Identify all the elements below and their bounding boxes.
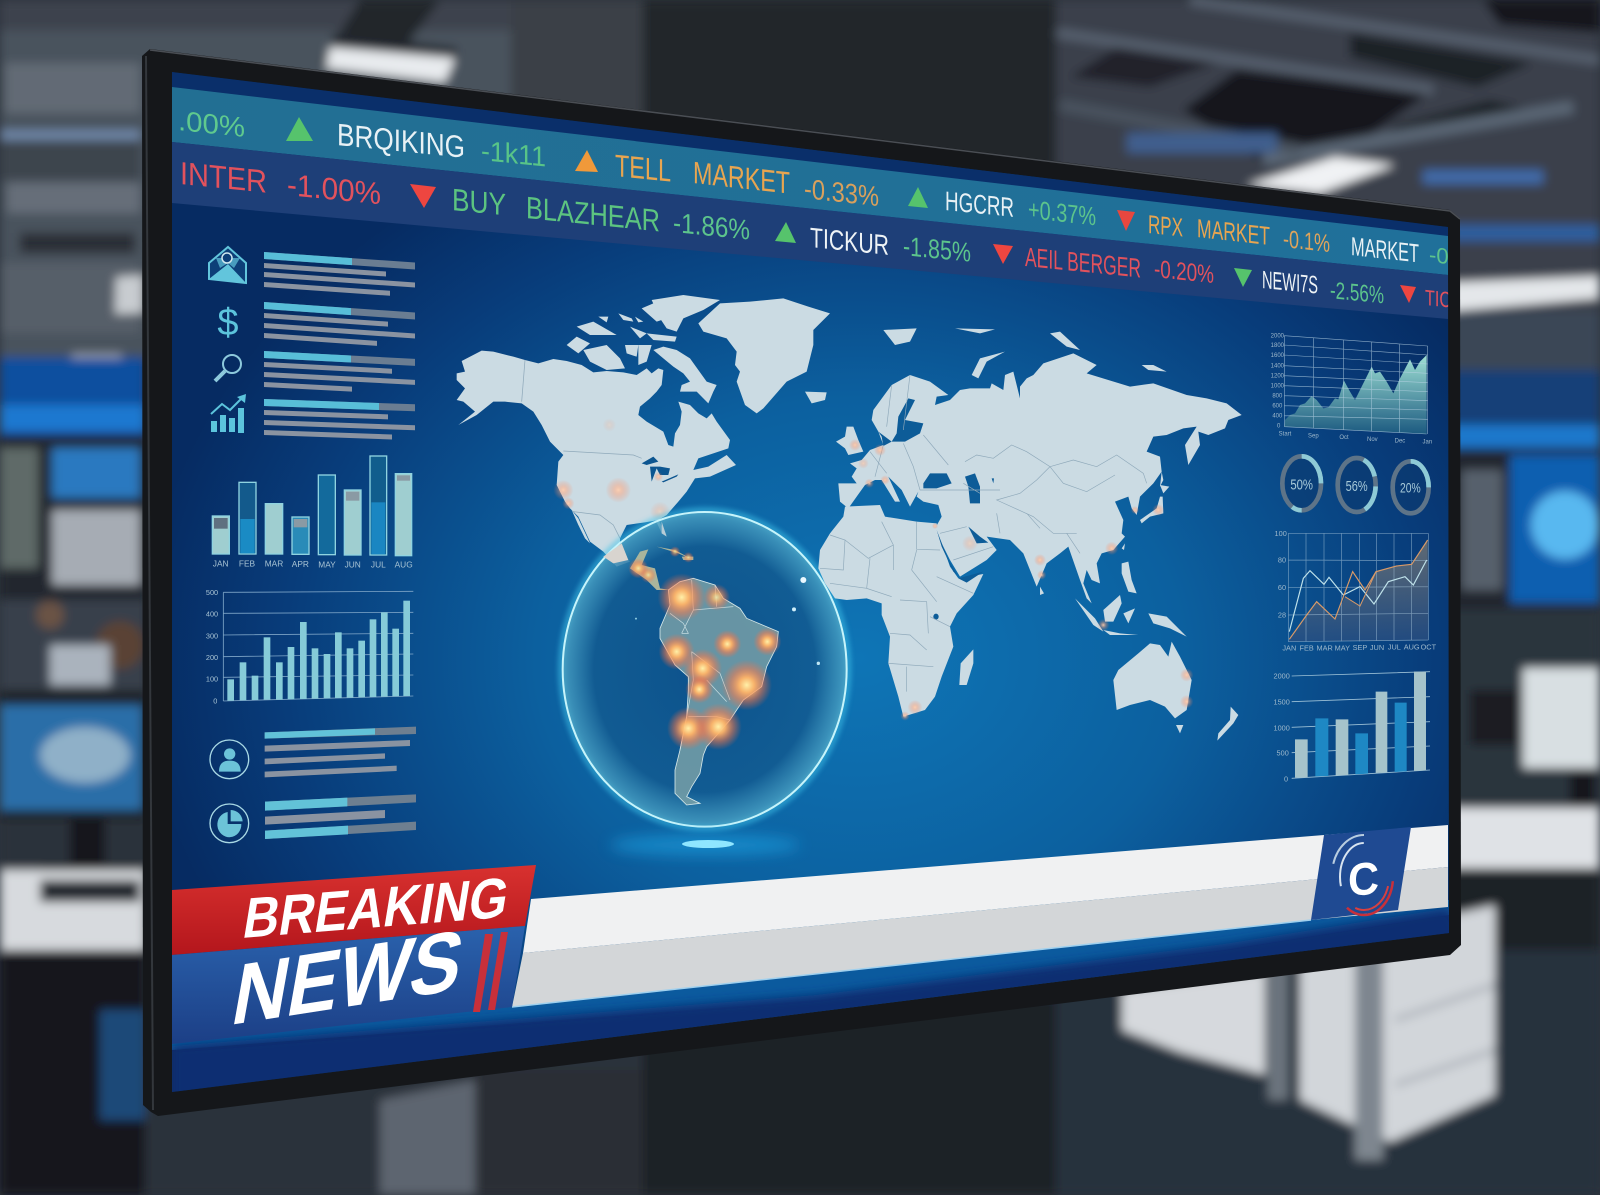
bar chart: grey and blue columns: 0: [1284, 774, 1288, 783]
red sea and gulf of aden: [933, 530, 983, 620]
text bars group four: [264, 399, 415, 440]
country borders: [820, 522, 973, 692]
area chart: 0: [1277, 424, 1281, 430]
bar chart: monthly: MAR: [265, 559, 283, 569]
breaking banner: [172, 865, 536, 955]
ticker row one text: MARKET: [693, 155, 790, 201]
globe disc: [563, 512, 847, 827]
ticker row two text: -1.86%: [673, 207, 750, 246]
area chart: 1400: [1271, 364, 1285, 370]
bar chart: monthly: AUG: [395, 560, 413, 570]
area chart: 800: [1272, 394, 1283, 400]
logo panel: C: [1348, 852, 1379, 906]
ticker row one text: .00%: [178, 105, 245, 143]
ticker row one text: -0.1%: [1283, 225, 1330, 258]
bar chart: grey and blue columns: 1500: [1274, 698, 1290, 707]
ticker row two text: AEIL BERGER: [1025, 242, 1141, 284]
hotspots: Old World: [849, 439, 1164, 631]
ticker row two text: [180, 155, 1451, 313]
area chart: 400: [1272, 414, 1283, 420]
ticker row two band: [172, 142, 1448, 319]
ticker row one text: +0.37%: [1028, 194, 1096, 231]
donut chart 50%: [1282, 456, 1321, 510]
panel: left icons with text bars: [209, 247, 415, 440]
area chart: 1800: [1271, 343, 1285, 349]
continent: South America: [660, 578, 778, 805]
icon: pie chart: [210, 804, 249, 843]
text bars group two: [264, 302, 415, 349]
ticker row two text: -2.56%: [1330, 277, 1384, 309]
bar chart: monthly: JUL: [371, 560, 386, 570]
area chart: 1600: [1271, 353, 1285, 359]
donut chart 20%: [1393, 461, 1429, 513]
ticker row one text: HGCRR: [945, 186, 1014, 223]
area chart: [1271, 334, 1432, 445]
continent outlines: [836, 328, 1242, 637]
lower third background: [172, 900, 1470, 1110]
globe reflection glow: [610, 834, 800, 856]
bar chart: monthly: MAY: [318, 559, 336, 569]
line chart: JUN: [1370, 643, 1384, 652]
bar chart: grey and blue columns: 500: [1277, 748, 1289, 757]
ticker row two text: -1.85%: [903, 231, 971, 268]
area chart: 600: [1272, 404, 1283, 410]
continent: Central America and Caribbean: [630, 547, 693, 590]
bar chart: values 0 to 500: 200: [206, 653, 218, 662]
South America borders: [670, 580, 733, 750]
bar chart: values 0 to 500: 100: [206, 675, 218, 684]
bar chart: values 0 to 500: 500: [206, 588, 218, 597]
line chart: 60: [1278, 583, 1286, 592]
area chart: 1200: [1271, 374, 1285, 380]
line chart: JUL: [1388, 642, 1401, 651]
line chart: 80: [1278, 556, 1286, 565]
icon: dollar sign: $: [217, 302, 239, 344]
area chart: Start: [1279, 432, 1292, 438]
bar chart: grey and blue columns: 1000: [1274, 724, 1290, 733]
bar chart: monthly: JUN: [345, 559, 361, 569]
line chart: SEP: [1353, 643, 1367, 652]
ticker row one text: MARKET: [1197, 213, 1270, 251]
logo panel: [1311, 827, 1411, 920]
area chart: Nov: [1367, 437, 1378, 443]
ticker row one text: -0.: [1429, 242, 1455, 270]
ticker row one text: -0.33%: [804, 173, 879, 212]
breaking banner: BREAKING: [239, 866, 513, 951]
ticker row two text: -1.00%: [287, 167, 381, 211]
bar chart: grey and blue columns: [1274, 672, 1430, 783]
ticker row two text: TIC: [1425, 285, 1451, 313]
icon: growth chart: [211, 394, 246, 433]
bar chart: monthly: FEB: [239, 559, 256, 569]
icon: envelope: [209, 247, 246, 283]
world map: Eurasia and islands: [836, 328, 1242, 637]
line chart: MAR: [1317, 644, 1333, 653]
ticker row two text: -0.20%: [1154, 255, 1214, 289]
text bars group one: [264, 252, 415, 298]
ticker row two text: INTER: [180, 155, 267, 200]
right ceiling: [1056, 0, 1600, 370]
area chart: Jan: [1423, 439, 1432, 445]
bar chart: monthly: APR: [292, 559, 309, 569]
borders: [522, 360, 642, 538]
line chart: FEB: [1300, 644, 1314, 653]
continent outlines: [818, 505, 1238, 741]
ticker row one text: BRQIKING: [337, 117, 465, 165]
ticker row one band: [172, 87, 1448, 275]
line chart: JAN: [1282, 644, 1296, 653]
area chart: 1000: [1271, 384, 1285, 390]
panel: left charts, scaled from detail coordinates: [206, 456, 416, 843]
hotspots: North America: [553, 418, 670, 522]
panel: right charts, scaled from detail coordinates: [1271, 334, 1437, 783]
ticker row two text: NEWI7S: [1262, 266, 1318, 300]
bar chart: values 0 to 500: [206, 588, 413, 705]
country borders: [870, 375, 1147, 560]
area chart: Sep: [1308, 433, 1319, 439]
line chart: AUG: [1404, 642, 1420, 651]
donut chart 50%: 50%: [1290, 477, 1313, 493]
line chart: [1275, 529, 1437, 653]
bar chart: grey and blue columns: 2000: [1274, 672, 1290, 681]
world map: Africa and Oceania: [818, 505, 1238, 741]
area chart: 2000: [1271, 334, 1285, 340]
globe outer glow: [561, 511, 848, 828]
bar chart: monthly: [212, 456, 413, 570]
ticker row one text: MARKET: [1351, 231, 1419, 268]
television monitor bezel: [142, 49, 1461, 1116]
ticker row one text: -1k11: [481, 135, 546, 172]
bar chart: monthly: JAN: [213, 559, 229, 569]
text bars group five: [265, 727, 416, 777]
donut chart 56%: [1338, 458, 1376, 512]
continent outlines: [457, 295, 830, 567]
world map: North America and Greenland: [457, 295, 830, 567]
icon: person: [210, 740, 249, 779]
text bars group six: [265, 794, 416, 839]
screen content: [170, 60, 1470, 1110]
bar chart: values 0 to 500: 300: [206, 631, 218, 640]
left ceiling: [0, 0, 511, 360]
highlighted globe lens over South America: [561, 511, 848, 828]
ticker row one text: TELL: [615, 148, 671, 189]
ticker row one text: RPX: [1148, 209, 1183, 242]
hotspots: South America: [628, 546, 820, 750]
bar chart: values 0 to 500: 0: [213, 696, 217, 705]
area chart: Oct: [1339, 435, 1349, 441]
hotspots: southern hemisphere: [900, 668, 1193, 721]
icon: magnifier: [215, 355, 241, 381]
line chart: OCT: [1421, 642, 1437, 651]
line chart: 100: [1275, 529, 1287, 538]
ticker row one text: [178, 105, 1455, 270]
donut chart 20%: 20%: [1400, 480, 1421, 496]
ticker row two text: BLAZHEAR: [526, 190, 660, 238]
ticker row two text: BUY: [452, 182, 506, 222]
area chart: Dec: [1395, 438, 1405, 444]
line chart: 28: [1278, 610, 1286, 619]
bar chart: values 0 to 500: 400: [206, 610, 218, 619]
donut chart 56%: 56%: [1346, 479, 1368, 495]
news banner: NEWS: [226, 911, 471, 1044]
Florida seen through lens: [662, 522, 667, 537]
Mexico tip seen through lens: [603, 543, 628, 563]
text bars group three: [264, 351, 415, 395]
inland seas: [878, 398, 994, 543]
line chart: MAY: [1335, 644, 1350, 653]
ticker row two text: TICKUR: [810, 222, 889, 261]
ticker top strip: [172, 72, 1448, 237]
lower third white banner: [512, 825, 1448, 1007]
great lakes: [642, 457, 678, 482]
